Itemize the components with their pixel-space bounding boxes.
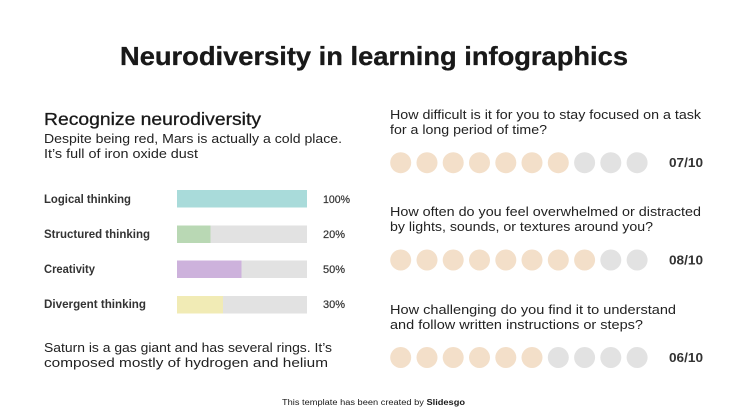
- question text: for a long period of time?: [390, 122, 547, 137]
- question text: [390, 107, 702, 137]
- bar chart: [44, 190, 350, 314]
- bar: divergent thinking: [44, 296, 345, 314]
- text block: Mars description: [44, 131, 342, 161]
- panel: question 3: [390, 302, 703, 368]
- bar: logical thinking: [44, 190, 350, 208]
- heading: recognize neurodiversity: Recognize neurodiversity: [44, 109, 261, 129]
- panel: recognize neurodiversity: [44, 109, 350, 370]
- question text: How often do you feel overwhelmed or distracted: [390, 204, 701, 219]
- score: 08/10: 08/10: [669, 254, 703, 268]
- text block: Mars description: Despite being red, Mars is actually a cold place.: [44, 131, 342, 146]
- text block: Saturn description: composed mostly of hydrogen and helium: [44, 355, 328, 370]
- bar: structured thinking: [44, 226, 345, 243]
- text block: Mars description: It’s full of iron oxide dust: [44, 146, 198, 161]
- bar: logical thinking: Logical thinking: [44, 194, 131, 206]
- bar: structured thinking: Structured thinking: [44, 229, 150, 241]
- bar: logical thinking: 100%: [323, 194, 350, 206]
- question text: [390, 302, 676, 332]
- bar: creativity: Creativity: [44, 264, 96, 276]
- score: 06/10: 06/10: [669, 351, 703, 365]
- score: 07/10: 07/10: [669, 156, 703, 170]
- panel: question 2: [390, 204, 703, 270]
- bar: divergent thinking: Divergent thinking: [44, 299, 146, 311]
- question text: and follow written instructions or steps?: [390, 317, 643, 332]
- question text: [390, 204, 701, 234]
- rating dots: 8 of 10: [390, 250, 648, 270]
- question text: How challenging do you find it to understand: [390, 302, 676, 317]
- bar: divergent thinking: 30%: [323, 299, 345, 311]
- text block: Saturn description: [44, 340, 333, 370]
- rating dots: 6 of 10: [390, 347, 648, 368]
- bar: creativity: 50%: [323, 264, 345, 276]
- bar: structured thinking: 20%: [323, 229, 345, 241]
- panel: question 1: [390, 107, 703, 173]
- footer credit: This template has been created by Slidesgo: [282, 398, 465, 407]
- title: Neurodiversity in learning infographics: [120, 41, 628, 71]
- question text: How difficult is it for you to stay focused on a task: [390, 107, 702, 122]
- bar: creativity: [44, 260, 345, 278]
- rating dots: 7 of 10: [390, 152, 648, 173]
- question text: by lights, sounds, or textures around you?: [390, 219, 653, 234]
- text block: Saturn description: Saturn is a gas giant and has several rings. It’s: [44, 340, 333, 355]
